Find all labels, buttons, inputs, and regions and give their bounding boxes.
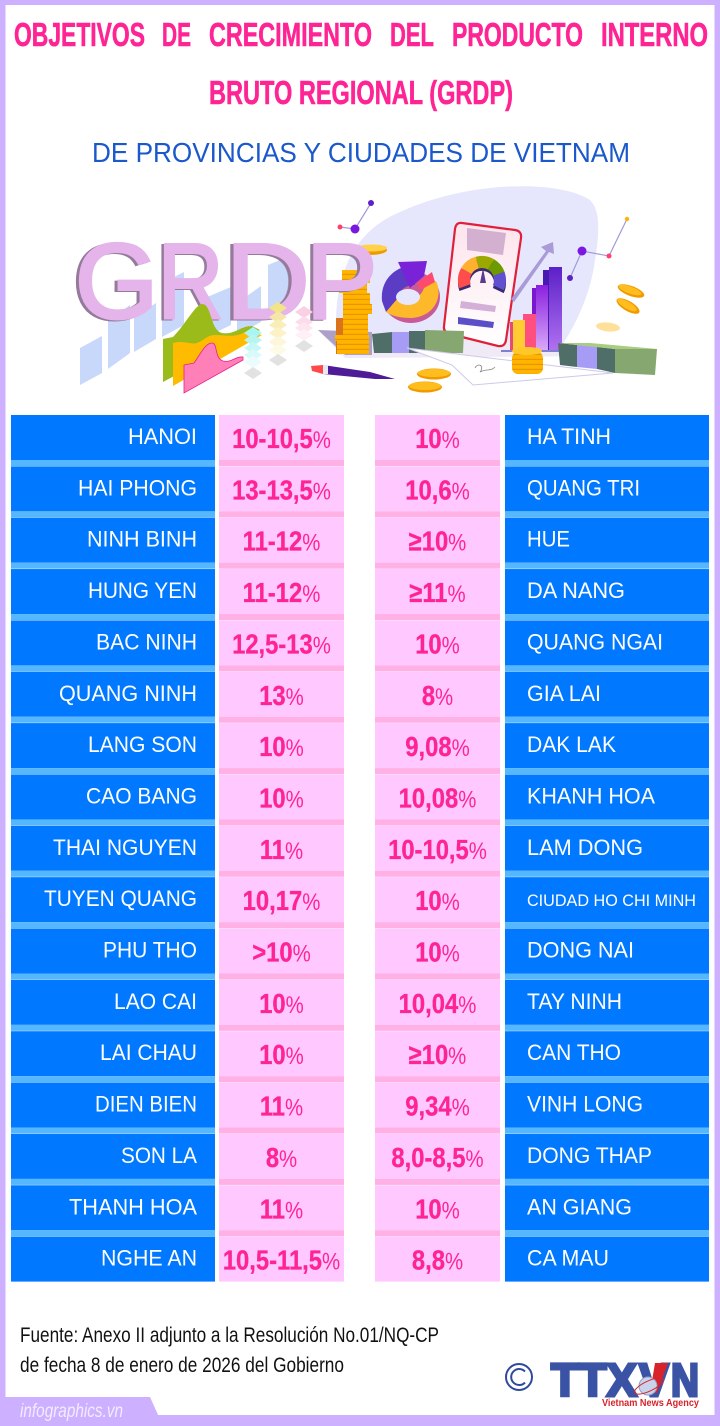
row: DONG THAP right — [375, 1134, 709, 1185]
row: THAI NGUYEN left — [11, 826, 344, 877]
GRDP lettering: D — [226, 221, 310, 341]
row: QUANG NGAI right — [375, 620, 709, 671]
row: DONG NAI right — [375, 928, 709, 980]
row: DONG THAP right: 8,0-8,5% — [391, 1141, 484, 1173]
row: HANOI left — [11, 415, 344, 466]
row: SON LA left — [11, 1134, 344, 1185]
title: CRECIMIENTO — [209, 16, 372, 53]
row: DIEN BIEN left: 11% — [260, 1090, 303, 1122]
row: CAN THO right: ≥10% — [409, 1038, 466, 1071]
row: HUE right: HUE — [527, 527, 570, 552]
title: BRUTO REGIONAL (GRDP) — [209, 74, 513, 111]
row: LAI CHAU left — [11, 1031, 344, 1082]
row: BAC NINH left: 12,5-13% — [232, 628, 331, 660]
row: QUANG TRI right: 10,6% — [405, 473, 470, 506]
row: LAI CHAU left: 10% — [259, 1038, 304, 1071]
row: CAO BANG left — [11, 774, 344, 825]
row: THANH HOA left: THANH HOA — [69, 1194, 197, 1219]
phone — [444, 223, 521, 346]
copyright symbol — [506, 1364, 532, 1390]
row: DA NANG right: DA NANG — [527, 578, 625, 603]
row: LAM DONG right: 10-10,5% — [388, 833, 487, 865]
diamond columns — [244, 302, 313, 379]
row: CIUDAD HO CHI MINH right: CIUDAD HO CHI MINH — [527, 891, 696, 910]
subtitle: DE PROVINCIAS Y CIUDADES DE VIETNAM — [92, 137, 630, 168]
row: TAY NINH right — [375, 980, 709, 1031]
row: AN GIANG right — [375, 1185, 709, 1236]
row: AN GIANG right: AN GIANG — [527, 1194, 632, 1219]
GRDP lettering — [75, 221, 377, 342]
row: LAO CAI left — [11, 980, 344, 1031]
row: HAI PHONG left — [11, 466, 344, 517]
row: THANH HOA left — [11, 1185, 344, 1236]
coin stack — [335, 244, 387, 354]
row: GIA LAI right: GIA LAI — [527, 681, 601, 706]
donut chart — [382, 261, 440, 323]
row: LAM DONG right — [375, 826, 709, 877]
row: CAN THO right: CAN THO — [527, 1040, 621, 1065]
row: CAN THO right — [375, 1031, 709, 1082]
row: QUANG NINH left: QUANG NINH — [59, 681, 197, 706]
row: THAI NGUYEN left: 11% — [260, 833, 303, 865]
area charts — [163, 304, 262, 393]
row: NINH BINH left: NINH BINH — [87, 527, 197, 552]
GRDP lettering: G — [75, 221, 158, 341]
row: GIA LAI right: 8% — [422, 679, 453, 711]
bar chart — [501, 267, 562, 352]
row: LAI CHAU left: LAI CHAU — [100, 1040, 197, 1065]
title: DE — [162, 16, 191, 53]
row: QUANG NGAI right: 10% — [415, 628, 460, 660]
row: KHANH HOA right — [375, 774, 709, 825]
row: CAO BANG left: CAO BANG — [86, 783, 197, 808]
row: BAC NINH left: BAC NINH — [96, 629, 197, 654]
row: TAY NINH right: TAY NINH — [527, 989, 622, 1014]
row: HUE right — [375, 518, 709, 569]
background bars — [80, 255, 292, 385]
pen — [311, 365, 395, 379]
row: NGHE AN left — [11, 1237, 344, 1282]
TTXVN logo: Vietnam News Agency — [602, 1397, 699, 1409]
row: LANG SON left — [11, 723, 344, 774]
title: DEL — [390, 16, 434, 53]
row: HA TINH right: 10% — [415, 422, 460, 454]
TTXVN logo: TTX — [551, 1354, 637, 1406]
title: PRODUCTO — [452, 16, 583, 53]
row: DIEN BIEN left: DIEN BIEN — [95, 1092, 197, 1117]
row: HANOI left: HANOI — [128, 424, 197, 449]
money stack left — [372, 330, 464, 353]
row: CIUDAD HO CHI MINH right — [375, 877, 709, 928]
row: TUYEN QUANG left: 10,17% — [243, 884, 320, 917]
row: TUYEN QUANG left: TUYEN QUANG — [44, 886, 197, 911]
row: THAI NGUYEN left: THAI NGUYEN — [53, 835, 197, 860]
illustration: GRDP finance scene — [75, 186, 657, 393]
row: CA MAU right: 8,8% — [412, 1244, 463, 1276]
row: QUANG TRI right — [375, 466, 709, 517]
source note — [20, 1324, 439, 1377]
footer tab: infographics.vn — [20, 1401, 123, 1422]
row: NINH BINH left — [11, 518, 344, 569]
TTXVN logo: N — [671, 1354, 699, 1406]
row: DONG NAI right: 10% — [415, 936, 460, 968]
row: CA MAU right: CA MAU — [527, 1246, 609, 1271]
source note: de fecha 8 de enero de 2026 del Gobierno — [20, 1354, 344, 1377]
row: CAO BANG left: 10% — [259, 782, 304, 814]
row: CIUDAD HO CHI MINH right: 10% — [415, 884, 460, 917]
row: DONG THAP right: DONG THAP — [527, 1143, 652, 1168]
row: HUNG YEN left: HUNG YEN — [88, 578, 197, 603]
row: GIA LAI right — [375, 672, 709, 723]
TTXVN logo — [551, 1354, 699, 1409]
GRDP lettering: R — [158, 222, 223, 342]
network nodes left — [338, 200, 374, 234]
table surface — [318, 330, 600, 358]
row: VINH LONG right: VINH LONG — [527, 1092, 643, 1117]
row: CA MAU right — [375, 1237, 709, 1282]
growth arrow — [511, 242, 554, 302]
row: HA TINH right — [375, 415, 709, 466]
row: NINH BINH left: 11-12% — [243, 525, 320, 557]
row: DONG NAI right: DONG NAI — [527, 938, 634, 962]
row: BAC NINH left — [11, 620, 344, 671]
row: DA NANG right — [375, 569, 709, 620]
background blob — [336, 186, 598, 355]
row: VINH LONG right: 9,34% — [405, 1090, 470, 1122]
row: HUNG YEN left: 11-12% — [243, 576, 320, 609]
row: HAI PHONG left: HAI PHONG — [78, 475, 197, 500]
row: DAK LAK right: DAK LAK — [527, 732, 616, 757]
row: HUE right: ≥10% — [409, 525, 466, 557]
row: PHU THO left: >10% — [252, 936, 311, 968]
row: LANG SON left: 10% — [259, 730, 304, 763]
row: AN GIANG right: 10% — [415, 1192, 460, 1225]
row: VINH LONG right — [375, 1083, 709, 1134]
GRDP lettering: P — [306, 221, 377, 341]
row: LAM DONG right: LAM DONG — [527, 835, 643, 860]
row: HAI PHONG left: 13-13,5% — [232, 473, 331, 506]
row: THANH HOA left: 11% — [260, 1192, 303, 1225]
row: QUANG NINH left: 13% — [259, 679, 304, 711]
row: NGHE AN left: NGHE AN — [101, 1246, 197, 1271]
row: LANG SON left: LANG SON — [88, 732, 197, 757]
row: SON LA left: SON LA — [121, 1143, 197, 1168]
source note: Fuente: Anexo II adjunto a la Resolución No.01/NQ-CP — [20, 1324, 439, 1347]
row: DIEN BIEN left — [11, 1083, 344, 1134]
row: SON LA left: 8% — [266, 1141, 297, 1173]
row: QUANG TRI right: QUANG TRI — [527, 475, 640, 500]
network nodes right — [567, 217, 629, 281]
row: HA TINH right: HA TINH — [527, 424, 611, 449]
gauge — [464, 262, 500, 291]
row: HUNG YEN left — [11, 569, 344, 620]
title: OBJETIVOS — [14, 16, 145, 53]
row: KHANH HOA right: KHANH HOA — [527, 783, 655, 808]
gold coins — [408, 282, 646, 392]
money stack right — [558, 343, 657, 375]
footer tab — [0, 1397, 163, 1426]
row: QUANG NINH left — [11, 672, 344, 723]
title — [14, 16, 708, 111]
row: DAK LAK right — [375, 723, 709, 774]
row: NGHE AN left: 10,5-11,5% — [223, 1244, 340, 1276]
row: KHANH HOA right: 10,08% — [399, 782, 476, 814]
row: TAY NINH right: 10,04% — [399, 987, 476, 1019]
row: TUYEN QUANG left — [11, 877, 344, 928]
row: QUANG NGAI right: QUANG NGAI — [527, 629, 663, 654]
row: PHU THO left — [11, 928, 344, 980]
row: DAK LAK right: 9,08% — [405, 730, 470, 763]
TTXVN logo: V — [639, 1354, 669, 1406]
row: DA NANG right: ≥11% — [409, 576, 466, 609]
row: LAO CAI left: LAO CAI — [114, 989, 197, 1014]
row: HANOI left: 10-10,5% — [232, 422, 331, 454]
row: PHU THO left: PHU THO — [103, 938, 197, 962]
row: LAO CAI left: 10% — [259, 987, 304, 1019]
document — [407, 348, 613, 385]
